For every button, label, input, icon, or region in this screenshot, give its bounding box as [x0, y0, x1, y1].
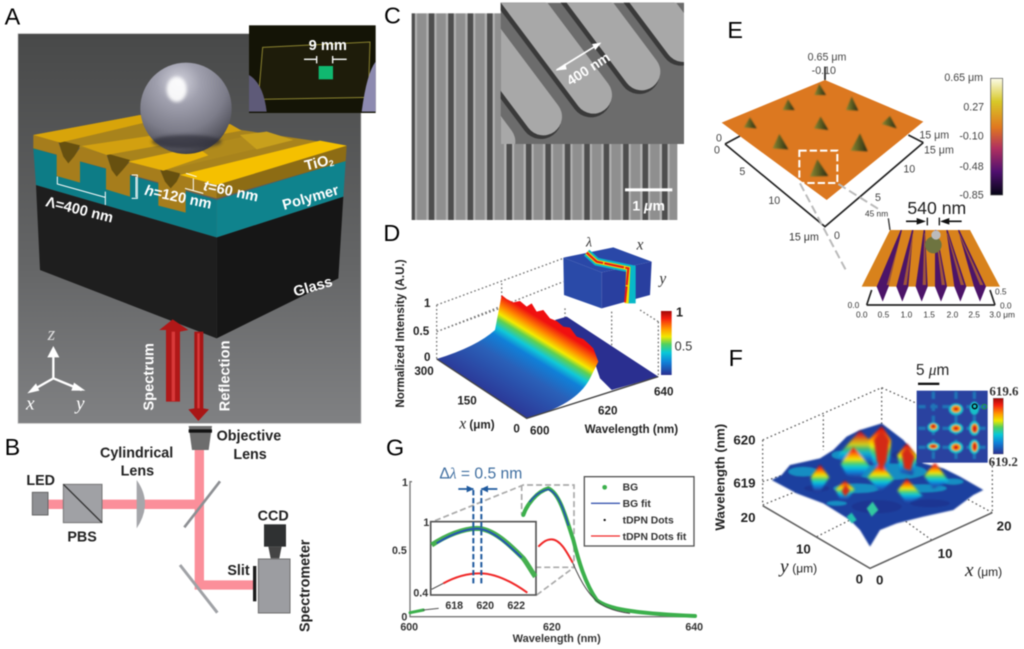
hyperspectral cube: x	[636, 237, 644, 254]
axis labels: 620	[598, 405, 617, 418]
axis triad: z	[47, 324, 56, 345]
setup labels: Cylindrical	[100, 445, 173, 461]
slit	[253, 566, 256, 601]
legend: tDPN Dots	[623, 516, 674, 527]
axis labels: 150	[457, 394, 477, 407]
background plate	[18, 34, 361, 423]
legend: tDPN Dots fit	[623, 532, 687, 543]
heading F: F	[729, 345, 743, 371]
colour bar: 0.5	[675, 339, 692, 353]
tick labels: 0.4	[413, 588, 428, 600]
SEM inset	[500, 2, 685, 145]
height colour bar: -0.85	[959, 190, 984, 202]
hyperspectral cube: λ	[585, 236, 592, 251]
AFM axes	[725, 67, 923, 227]
axis labels: 300	[414, 365, 434, 378]
tick labels	[392, 477, 703, 645]
grating micrograph	[412, 13, 677, 220]
hyperspectral cube	[563, 236, 666, 308]
axis labels	[394, 259, 678, 437]
ridged inset: 2.0	[947, 309, 959, 319]
panel G: intensity spectra	[386, 434, 703, 645]
dimension labels: t=60 nm	[202, 178, 260, 206]
PBS	[63, 484, 102, 523]
height colour bar: -0.10	[959, 130, 984, 142]
ridged inset: 3.0 μm	[989, 309, 1015, 319]
hyperspectral cube: y	[657, 270, 666, 287]
ridged inset: 0.0	[1000, 300, 1012, 310]
axis labels: 0	[856, 571, 863, 586]
height colour bar	[944, 72, 1003, 202]
panel B: optical setup	[5, 426, 313, 632]
axis labels: 10	[796, 541, 811, 556]
axis labels: 0	[876, 573, 883, 588]
TiO2 grating	[33, 115, 347, 213]
BG spectrum	[410, 488, 695, 616]
wavelength shift callout: Δλ = 0.5 nm	[439, 466, 522, 483]
surface peaks	[811, 426, 949, 503]
colour bar	[661, 306, 692, 375]
axis labels: 640	[654, 386, 673, 399]
axis labels: 0.5	[413, 325, 430, 338]
AFM tick labels: 15 μm	[789, 232, 819, 244]
spectrometer and CCD	[258, 524, 290, 613]
arrow labels: Reflection	[217, 340, 233, 411]
ridged inset: 0.0	[848, 300, 860, 310]
axis labels: y (μm)	[778, 557, 817, 578]
dimension labels: TiO	[303, 153, 330, 175]
mirror	[180, 565, 217, 613]
AFM tick labels: 0.65 μm	[808, 52, 847, 64]
setup labels: CCD	[258, 509, 289, 525]
AFM tick labels: 10	[903, 164, 915, 176]
panel E: AFM topography	[714, 17, 1015, 319]
axis labels: 10	[938, 546, 952, 561]
dimension labels: Polymer	[281, 182, 341, 214]
axis labels: x (μm)	[458, 415, 495, 432]
dots on plane	[744, 84, 897, 177]
setup labels: Spectrometer	[297, 539, 313, 632]
tick labels: 600	[400, 622, 418, 634]
far floor of surface	[555, 317, 658, 390]
AFM tick labels: 15 μm	[924, 144, 954, 156]
tDPN spectrum	[538, 539, 630, 613]
AFM tick labels: 0	[714, 144, 720, 156]
ridged inset: 0.5	[995, 287, 1007, 297]
heading G: G	[386, 434, 404, 460]
ridged inset: 45 nm	[865, 209, 888, 219]
colour bar	[989, 383, 1019, 469]
axis labels: 1	[424, 297, 431, 310]
height colour bar: 0.27	[963, 102, 984, 114]
tick labels: Wavelength (nm)	[513, 633, 601, 645]
legend: BG	[623, 483, 638, 494]
tick labels: 1	[423, 517, 429, 529]
axis labels: 0	[513, 422, 520, 435]
heading C: C	[384, 2, 401, 28]
sphere	[140, 63, 232, 154]
heading E: E	[727, 17, 743, 43]
map inset	[917, 391, 988, 463]
axis triad: x	[25, 393, 35, 414]
dimension labels	[44, 152, 341, 301]
red arrows	[159, 319, 209, 421]
light path	[48, 450, 255, 585]
dimension labels: Glass	[292, 274, 334, 301]
axis triad: y	[74, 393, 85, 414]
spectral ridge surface	[437, 295, 598, 418]
tick labels: 622	[507, 600, 525, 612]
x and wavelength axes	[437, 359, 658, 418]
heading D: D	[383, 220, 400, 246]
tick labels: 0	[401, 612, 407, 624]
axis labels: Wavelength (nm)	[713, 424, 728, 531]
arrow labels	[141, 340, 233, 411]
beam splitter	[184, 481, 220, 527]
540 nm marker: 540 nm	[907, 198, 966, 218]
polymer layer	[33, 148, 346, 237]
height colour bar: -0.48	[959, 161, 984, 173]
setup labels: Objective	[217, 429, 281, 445]
dotted box	[763, 388, 992, 540]
colour bar: 1	[676, 306, 683, 320]
floor axes	[763, 506, 992, 568]
dimension lines	[57, 173, 203, 205]
legend	[584, 477, 694, 546]
tick labels: 620	[543, 622, 561, 634]
selection box	[799, 151, 837, 183]
orange plane	[722, 80, 923, 200]
colour bar: 619.2	[989, 454, 1018, 469]
tick labels: 618	[445, 600, 463, 612]
panel C: SEM image	[384, 0, 684, 220]
height colour bar: 0.65 μm	[944, 72, 983, 84]
AFM tick labels	[714, 52, 954, 244]
zoom guides	[800, 183, 880, 272]
axis labels: 20	[741, 510, 755, 525]
colour bar: 619.6	[989, 383, 1019, 398]
axis labels: 0	[424, 351, 430, 364]
setup labels: PBS	[67, 530, 97, 546]
SEM inset: 400 nm	[564, 49, 613, 89]
axis labels: x (μm)	[964, 560, 1002, 581]
tick labels: 640	[685, 622, 703, 634]
small cyan peaks	[847, 502, 878, 523]
scale bar: 5 μm	[916, 362, 949, 379]
setup labels: Slit	[227, 563, 250, 579]
glass layer	[36, 185, 343, 338]
dimension labels: 2	[328, 158, 335, 169]
dimension labels: Λ=400 nm	[44, 194, 115, 227]
panel D: spectra surface	[383, 220, 692, 437]
axis labels: 619	[733, 475, 756, 490]
cylindrical lens	[137, 480, 145, 528]
AFM tick labels: 10	[768, 195, 780, 207]
panel A: device schematic	[5, 4, 376, 423]
blue surface	[772, 423, 983, 547]
tick labels: 0.5	[392, 545, 407, 557]
ridged inset: 0.5	[878, 309, 890, 319]
axis labels: 620	[733, 433, 756, 448]
objective lens	[189, 426, 212, 450]
legend: BG fit	[623, 499, 651, 510]
panel F: wavelength map	[713, 345, 1019, 588]
wavelength shift callout	[439, 466, 522, 492]
setup labels: Lens	[121, 463, 154, 479]
AFM tick labels: 5	[875, 192, 881, 204]
heading A: A	[5, 4, 21, 30]
heading B: B	[5, 434, 20, 460]
LED	[32, 492, 48, 515]
dimension labels: h=120 nm	[143, 183, 213, 213]
dotted box	[437, 258, 658, 382]
tick labels: 1	[402, 477, 408, 489]
axis labels	[713, 424, 1011, 588]
scale bar: 1 μm	[632, 198, 665, 214]
tick labels: 620	[476, 600, 494, 612]
AFM tick labels: 5	[739, 166, 745, 178]
setup labels: Lens	[233, 447, 267, 463]
scale bar	[625, 188, 672, 214]
axis labels: 600	[530, 424, 549, 437]
arrow labels: Spectrum	[141, 343, 157, 411]
plot axes	[410, 482, 695, 617]
ridged inset: 1.0	[901, 309, 913, 319]
axis labels: Normalized Intensity (A.U.)	[394, 259, 407, 408]
AFM tick labels: -0.10	[812, 65, 836, 77]
ridged inset	[848, 209, 1015, 319]
axis labels: Wavelength (nm)	[585, 423, 678, 436]
setup labels: LED	[26, 473, 55, 489]
ridged inset: 0.0	[856, 309, 868, 319]
AFM tick labels: 0	[834, 230, 840, 242]
photo inset	[249, 25, 376, 113]
zoom guides	[435, 485, 574, 595]
red peak cores	[842, 429, 915, 497]
zoom inset	[431, 490, 536, 595]
ridged inset: 2.5	[968, 309, 980, 319]
AFM tick labels: 15 μm	[919, 129, 949, 141]
axis labels: 20	[997, 519, 1011, 534]
axis triad	[25, 324, 85, 414]
setup labels	[26, 429, 313, 632]
photo inset: 9 mm	[309, 38, 347, 54]
AFM tick labels: 0	[716, 133, 722, 145]
ridged inset: 1.5	[923, 309, 935, 319]
